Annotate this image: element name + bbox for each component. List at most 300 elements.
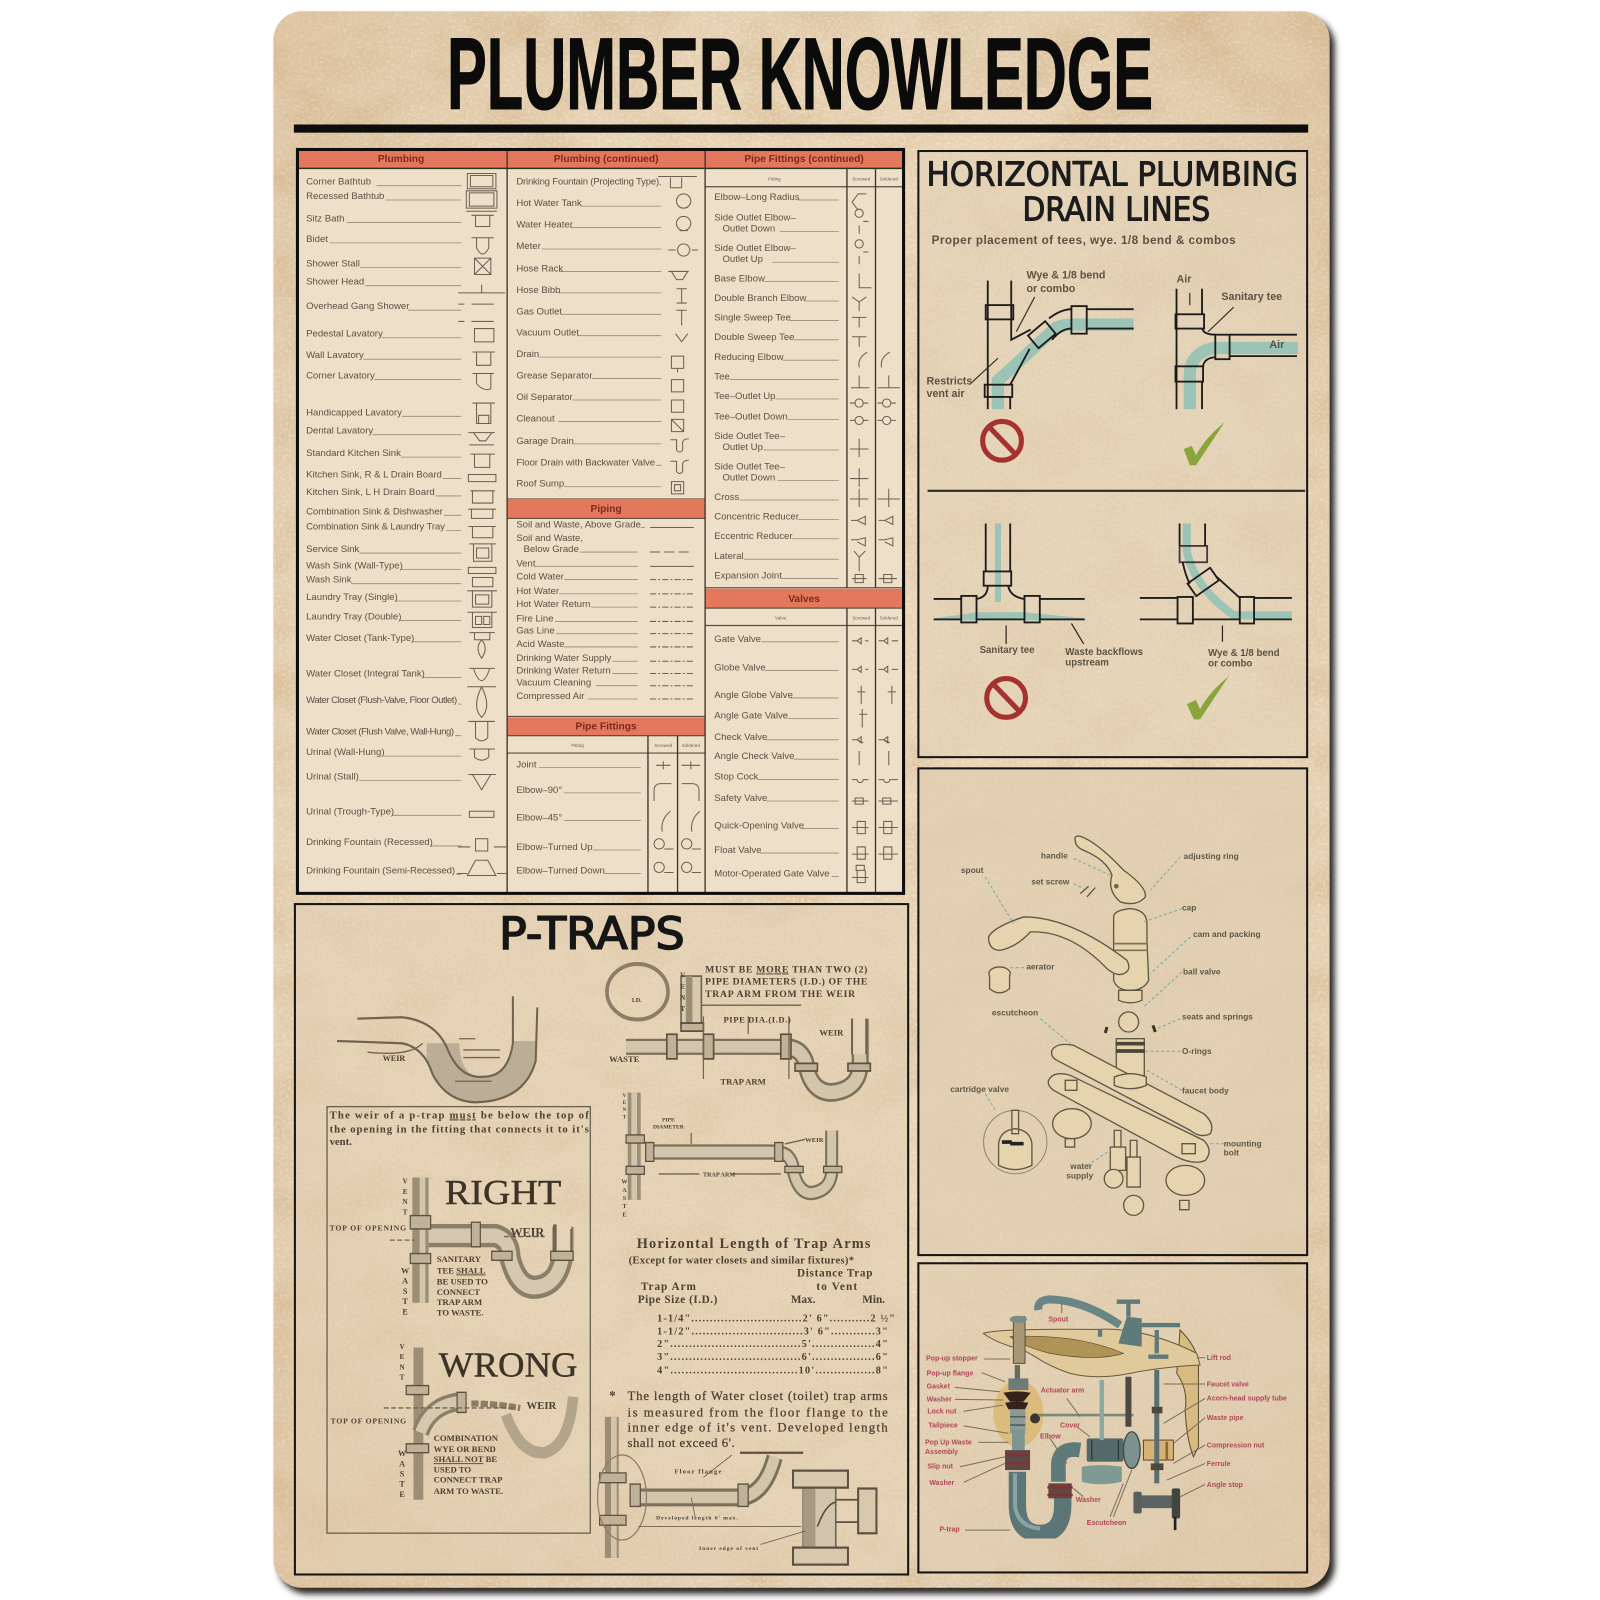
column 1 plumbing fixtures list: Water Closet (Tank-Type)	[306, 633, 414, 644]
column 1 plumbing fixtures list: Urinal (Trough-Type)	[306, 806, 394, 817]
column 1 plumbing fixtures list: Sitz Bath	[306, 213, 344, 224]
sink drawing with labels: Faucet valve	[1207, 1381, 1249, 1388]
column 1 plumbing fixtures list: Pedestal Lavatory	[306, 329, 383, 340]
faucet drawing with labels: adjusting ring	[1184, 851, 1239, 861]
p-trap diagram labels: WEIR	[819, 1028, 844, 1038]
diagram: wrong sanitary tee on horizontal	[934, 523, 1143, 668]
vertical vent and waste letters: N	[399, 1363, 405, 1371]
table: horizontal length of trap arms: 1-1/4"..............................2' 6"...........2 ½"	[657, 1313, 895, 1324]
trap arm diameter rule text: TRAP ARM FROM THE WEIR	[705, 989, 856, 1000]
panel: plumbing symbols chart	[297, 149, 904, 893]
panel heading line 2: DRAIN LINES	[1022, 190, 1210, 228]
valves list: Motor-Operated Gate Valve	[714, 869, 830, 880]
valves list: Stop Cock	[714, 772, 759, 783]
weir explanation box: the opening in the fitting that connects it to it's	[330, 1124, 589, 1136]
piping types list: Soil and Waste,	[516, 533, 583, 544]
column 3 pipe fittings continued list: Side Outlet Elbow–	[714, 243, 796, 254]
table: horizontal length of trap arms: 1-1/2"..............................3' 6"............3"	[657, 1327, 888, 1338]
water closet footnote: The length of Water closet (toilet) trap arms	[628, 1389, 888, 1403]
diagram: wrong wye on horizontal-to-vertical: or combo	[1027, 283, 1076, 295]
faucet drawing with labels: mounting	[1224, 1138, 1262, 1148]
icon: check mark	[1187, 677, 1229, 719]
faucet drawing with labels: cartridge valve	[950, 1084, 1009, 1094]
valves list: Check Valve	[714, 732, 767, 743]
piping types list: Drinking Water Supply	[516, 653, 611, 664]
vertical vent and waste letters: W	[401, 1266, 410, 1275]
column 3 pipe fittings continued list: Side Outlet Tee–	[714, 461, 786, 472]
column 3 pipe fittings continued list: Tee–Outlet Down	[714, 411, 788, 422]
table: horizontal length of trap arms	[629, 1236, 895, 1376]
piping types list: Compressed Air	[516, 691, 585, 702]
column 2 plumbing list: Drain	[516, 349, 539, 360]
vertical vent and waste letters: N	[680, 994, 686, 1002]
pipe fittings list: Elbow–45°	[516, 812, 562, 823]
table: horizontal length of trap arms: Max.	[791, 1294, 816, 1306]
right p-trap diagram	[390, 1177, 573, 1303]
sink drawing with labels: Lift rod	[1207, 1355, 1231, 1362]
chart section headers: Valve	[775, 615, 787, 620]
pipe diameter circle	[607, 964, 668, 1019]
faucet drawing with labels: O-rings	[1182, 1046, 1212, 1056]
plate background	[273, 11, 1335, 1594]
vertical vent and waste letters: W	[621, 1180, 628, 1186]
column 2 plumbing list	[516, 177, 661, 490]
faucet drawing with labels: ball valve	[1183, 967, 1221, 977]
piping types list	[516, 520, 694, 702]
sink drawing with labels: Ferrule	[1207, 1461, 1231, 1468]
vertical vent and waste letters: T	[400, 1374, 405, 1382]
piping types list: Cold Water	[516, 572, 565, 583]
column 3 pipe fittings continued list: Side Outlet Elbow–	[714, 212, 796, 223]
pipe fittings list: Joint	[516, 759, 537, 770]
column 3 pipe fittings continued list: Single Sweep Tee	[714, 312, 791, 323]
diagram: correct sanitary tee: Air	[1269, 339, 1284, 351]
column 1 plumbing fixtures list: Drinking Fountain (Semi-Recessed)	[306, 865, 455, 876]
sink drawing with labels: Spout	[1048, 1316, 1069, 1323]
sink drawing with labels: Escutcheon	[1087, 1520, 1126, 1527]
piping types list: Vacuum Cleaning	[516, 678, 591, 689]
column 3 pipe fittings continued list: Elbow–Long Radius	[714, 192, 800, 203]
water closet footnote: shall not exceed 6'.	[628, 1436, 735, 1450]
water closet footnote: inner edge of it's vent. Developed length	[628, 1421, 888, 1435]
sink drawing with labels: Tailpiece	[928, 1422, 958, 1429]
column 2 plumbing list: Grease Separator	[516, 371, 593, 382]
sink drawing with labels: Waste pipe	[1207, 1415, 1244, 1422]
p-trap diagram labels: BE USED TO	[437, 1277, 488, 1287]
diagram: wrong wye on horizontal-to-vertical: Restricts	[927, 376, 972, 388]
p-trap diagram labels: CONNECT TRAP	[434, 1475, 503, 1485]
panel subheading: Proper placement of tees, wye. 1/8 bend & combos	[932, 234, 1236, 247]
column 1 fixture symbols	[457, 173, 507, 876]
valves list: Angle Gate Valve	[714, 710, 788, 721]
table: horizontal length of trap arms: Distance Trap	[797, 1268, 872, 1280]
p-trap diagram labels: TO WASTE.	[437, 1307, 484, 1317]
p-trap diagram labels: Developed length 6' max.	[656, 1515, 738, 1521]
p-trap diagram labels: I.D.	[632, 998, 642, 1004]
sink drawing with labels: Pop Up Waste	[925, 1440, 972, 1447]
pipe drawings	[337, 964, 876, 1565]
panel: faucet exploded view	[918, 768, 1307, 1255]
column 3 pipe fittings continued list: Side Outlet Tee–	[714, 431, 786, 442]
p-trap diagram labels: COMBINATION	[434, 1433, 499, 1443]
piping types list: Hot Water Return	[516, 599, 590, 610]
sink drawing with labels: Cover	[1060, 1422, 1080, 1429]
p-trap diagram labels: Inner edge of vent	[699, 1546, 758, 1552]
column 1 plumbing fixtures list: Laundry Tray (Single)	[306, 592, 398, 603]
vertical vent and waste letters: T	[623, 1114, 627, 1120]
vertical vent and waste letters: A	[399, 1459, 405, 1468]
pipe fittings list	[516, 759, 701, 876]
column 1 plumbing fixtures list: Dental Lavatory	[306, 426, 373, 437]
valves list: Globe Valve	[714, 662, 766, 673]
vertical vent and waste letters: V	[680, 972, 686, 980]
column 2 plumbing list: Hose Rack	[516, 263, 563, 274]
p-trap diagram labels: TRAP ARM	[437, 1297, 482, 1307]
column 3 pipe fittings continued list: Outlet Down	[722, 224, 775, 235]
sink drawing with labels: Angle stop	[1207, 1482, 1243, 1489]
diagram: wrong sanitary tee on horizontal: upstream	[1065, 657, 1109, 668]
p-trap diagram labels: ARM TO WASTE.	[434, 1486, 503, 1496]
column 1 plumbing fixtures list: Combination Sink & Laundry Tray	[306, 522, 445, 533]
column 1 plumbing fixtures list: Drinking Fountain (Recessed)	[306, 837, 433, 848]
faucet drawing with labels: seats and springs	[1182, 1012, 1253, 1022]
column 2 plumbing list: Floor Drain with Backwater Valve	[516, 457, 655, 468]
column 2 plumbing list: Vacuum Outlet	[516, 328, 579, 339]
pipe fittings list: Elbow–Turned Down	[516, 865, 605, 876]
column 2 plumbing list: Meter	[516, 241, 542, 252]
vertical vent and waste letters: S	[403, 1287, 408, 1296]
large p-trap with weir	[337, 996, 537, 1102]
sink drawing with labels: Washer	[1076, 1497, 1101, 1504]
column 1 plumbing fixtures list: Shower Stall	[306, 258, 360, 269]
vertical vent and waste letters: T	[399, 1480, 405, 1489]
column 1 plumbing fixtures list: Corner Lavatory	[306, 371, 375, 382]
chart section headers: Fitting	[571, 743, 584, 748]
p-trap diagram labels: PIPE DIA.(I.D.)	[723, 1014, 791, 1024]
p-trap diagram labels: TRAP ARM	[703, 1173, 735, 1179]
table: horizontal length of trap arms: Pipe Size (I.D.)	[638, 1294, 718, 1306]
sink drawing with labels: Washer	[927, 1397, 952, 1404]
weir explanation box	[327, 1107, 590, 1533]
column 3 pipe fittings continued list: Tee–Outlet Up	[714, 391, 776, 402]
p-trap diagram labels: TOP OF OPENING	[331, 1416, 406, 1425]
panel heading: P-TRAPS	[499, 907, 685, 960]
water closet footnote: *	[609, 1388, 616, 1403]
icon: check mark	[1184, 422, 1224, 465]
column 1 plumbing fixtures list: Urinal (Stall)	[306, 772, 359, 783]
vertical vent and waste letters: N	[403, 1198, 409, 1206]
piping types list: Drinking Water Return	[516, 665, 611, 676]
vertical vent and waste letters: T	[680, 1005, 685, 1013]
chart section headers: Screwed	[654, 743, 673, 748]
valves list	[714, 634, 839, 880]
p-trap diagram labels: WEIR	[510, 1226, 544, 1240]
chart section headers: Soldered	[880, 177, 898, 182]
p-trap diagram labels: SHALL NOT BE	[434, 1454, 497, 1464]
faucet drawing with labels: bolt	[1224, 1148, 1239, 1158]
column 3 pipe fittings continued list: Eccentric Reducer	[714, 531, 793, 542]
valves list: Safety Valve	[714, 793, 767, 804]
column 3 pipe fittings continued list: Lateral	[714, 551, 744, 562]
chart column headers: Plumbing (continued)	[554, 154, 658, 165]
faucet drawing with labels: set screw	[1031, 877, 1070, 887]
vertical vent and waste letters: W	[398, 1449, 407, 1458]
valves list: Quick-Opening Valve	[714, 821, 804, 832]
pipe fittings list: Elbow–Turned Up	[516, 842, 593, 853]
chart column headers: Pipe Fittings (continued)	[744, 154, 864, 165]
piping types list: Hot Water	[516, 586, 560, 597]
vertical vent and waste letters: E	[623, 1100, 627, 1106]
vertical vent and waste letters: E	[402, 1307, 408, 1316]
column 3 pipe fittings continued list: Outlet Up	[722, 254, 763, 265]
panel heading: HORIZONTAL PLUMBING	[927, 156, 1298, 194]
column 3 pipe fittings continued list: Outlet Up	[722, 442, 763, 453]
sink drawing with labels: Pop-up stopper	[926, 1356, 978, 1363]
diagram: correct wye on horizontal: or combo	[1208, 658, 1252, 669]
faucet drawing with labels: supply	[1066, 1171, 1093, 1181]
piping types list: Acid Waste	[516, 639, 564, 650]
p-trap diagram labels: USED TO	[434, 1464, 471, 1474]
valves list: Gate Valve	[714, 634, 761, 645]
p-trap diagram labels: WYE OR BEND	[434, 1444, 496, 1454]
vertical vent and waste letters: E	[680, 983, 685, 991]
p-trap diagram labels: TEE SHALL	[437, 1265, 486, 1275]
column 2 plumbing symbols	[658, 177, 698, 494]
column 1 plumbing fixtures list: Laundry Tray (Double)	[306, 611, 401, 622]
diagram: correct sanitary tee	[1176, 274, 1298, 409]
sink drawing with labels: P-trap	[939, 1526, 960, 1533]
p-trap diagram labels	[330, 998, 844, 1552]
column 3 pipe fittings continued list: Cross	[714, 492, 740, 503]
trap arm diagram	[626, 976, 870, 1092]
sink drawing with labels: Washer	[929, 1480, 955, 1487]
column 1 plumbing fixtures list: Bidet	[306, 234, 328, 245]
column 2 plumbing list: Garage Drain	[516, 436, 574, 447]
p-trap diagram labels: SANITARY	[437, 1254, 482, 1264]
piping types list: Fire Line	[516, 613, 554, 624]
WRONG label: WRONG	[439, 1346, 578, 1385]
sink drawing with labels: Pop-up flange	[927, 1371, 973, 1378]
sink drawing with labels: Assembly	[925, 1449, 958, 1456]
faucet drawing with labels: cap	[1182, 903, 1196, 913]
trap arm diameter rule text: PIPE DIAMETERS (I.D.) OF THE	[705, 977, 867, 988]
diagram: correct wye on horizontal: Wye & 1/8 bend	[1208, 648, 1280, 659]
vertical vent and waste letters: S	[400, 1470, 405, 1479]
pipe fittings list: Elbow–90°	[516, 785, 562, 796]
valves list: Angle Check Valve	[714, 751, 795, 762]
chart section headers: Piping	[591, 504, 622, 515]
faucet drawing with labels: faucet body	[1182, 1086, 1229, 1096]
icon: prohibited	[987, 679, 1026, 717]
faucet drawing with labels	[950, 836, 1262, 1215]
panel: sink plumbing parts	[918, 1263, 1307, 1572]
chart section headers: Soldered	[880, 615, 898, 620]
column 1 plumbing fixtures list: Corner Bathtub	[306, 177, 371, 188]
sink drawing with labels: Gasket	[927, 1383, 951, 1390]
faucet drawing with labels: aerator	[1026, 962, 1055, 972]
diagram: correct wye on horizontal	[1140, 523, 1292, 669]
water closet footnote: is measured from the floor flange to the	[628, 1405, 888, 1419]
faucet drawing with labels: water	[1069, 1161, 1093, 1171]
column 1 plumbing fixtures list: Wash Sink (Wall-Type)	[306, 560, 403, 571]
column 3 pipe fittings continued list: Double Sweep Tee	[714, 332, 795, 343]
column 2 plumbing list: Water Heater	[516, 220, 574, 231]
piping types list: Below Grade	[523, 544, 579, 555]
table: horizontal length of trap arms: (Except for water closets and similar fixtures)*	[629, 1254, 854, 1266]
p-trap diagram labels: Floor flange	[674, 1468, 721, 1475]
vertical vent and waste letters: V	[623, 1093, 627, 1099]
table: horizontal length of trap arms: 2"...................................5'.................4"	[657, 1339, 888, 1350]
column 1 plumbing fixtures list: Handicapped Lavatory	[306, 407, 402, 418]
vertical vent and waste letters: T	[403, 1208, 408, 1216]
title rule	[294, 124, 1308, 133]
faucet drawing with labels: spout	[961, 865, 984, 875]
column 1 plumbing fixtures list: Standard Kitchen Sink	[306, 448, 401, 459]
column 3 pipe fittings continued list: Concentric Reducer	[714, 511, 800, 522]
valves list: Float Valve	[714, 845, 761, 856]
table: horizontal length of trap arms: Min.	[862, 1294, 885, 1306]
vertical vent and waste letters: A	[402, 1277, 408, 1286]
trap arm diameter rule text: MUST BE MORE THAN TWO (2)	[705, 964, 867, 975]
diagram: wrong wye on horizontal-to-vertical: Wye & 1/8 bend	[1027, 270, 1105, 282]
p-trap diagram labels: WEIR	[805, 1137, 824, 1144]
vertical vent and waste letters: N	[623, 1107, 627, 1113]
faucet drawing with labels: cam and packing	[1193, 929, 1261, 939]
vertical vent and waste letters: V	[399, 1343, 405, 1351]
column 1 plumbing fixtures list: Kitchen Sink, R & L Drain Board	[306, 470, 442, 481]
p-trap diagram labels: DIAMETER	[653, 1125, 685, 1131]
sink drawing with labels	[925, 1299, 1287, 1533]
chart section headers: Screwed	[852, 615, 871, 620]
column 3 pipe fittings continued list	[714, 192, 839, 582]
column 1 plumbing fixtures list: Wash Sink	[306, 575, 352, 586]
column 3 pipe fittings continued list: Outlet Down	[722, 473, 775, 484]
sink drawing with labels: Slip nut	[927, 1463, 954, 1470]
floor flange and vent diagram	[598, 1417, 876, 1565]
second trap arm diagram	[626, 1092, 842, 1200]
p-trap diagram labels: WEIR	[383, 1054, 405, 1063]
p-trap diagram labels: CONNECT	[437, 1287, 480, 1297]
chart column headers	[298, 151, 903, 168]
column 1 plumbing fixtures list: Service Sink	[306, 544, 360, 555]
sink drawing with labels: Compression nut	[1207, 1442, 1265, 1449]
column 2 plumbing list: Hot Water Tank	[516, 198, 582, 209]
vertical vent and waste letters: E	[399, 1490, 405, 1499]
diagram: correct sanitary tee: Air	[1177, 274, 1191, 286]
chart outer frame	[297, 149, 904, 893]
p-trap diagram labels: PIPE	[662, 1117, 675, 1123]
column 1 plumbing fixtures list: Overhead Gang Shower	[306, 301, 410, 312]
vertical vent and waste letters: E	[403, 1188, 408, 1196]
chart section headers: Valves	[788, 594, 820, 605]
p-trap diagram labels: TRAP ARM	[720, 1077, 766, 1087]
vertical vent and waste letters: S	[623, 1196, 627, 1202]
chart section headers: Screwed	[852, 177, 871, 182]
column 3 pipe fittings continued list: Base Elbow	[714, 274, 765, 285]
vertical vent and waste letters	[398, 972, 686, 1499]
table: horizontal length of trap arms: Trap Arm	[641, 1281, 697, 1293]
piping types list: Soil and Waste, Above Grade	[516, 520, 641, 531]
column 2 plumbing list: Roof Sump	[516, 479, 564, 490]
sink drawing with labels: Elbow	[1040, 1433, 1061, 1440]
vertical vent and waste letters: E	[400, 1353, 405, 1361]
column 2 plumbing list: Gas Outlet	[516, 306, 562, 317]
panel: horizontal plumbing drain lines	[918, 151, 1307, 757]
vertical vent and waste letters: E	[622, 1212, 627, 1218]
column 2 plumbing list: Oil Separator	[516, 392, 574, 403]
column 2 plumbing list: Cleanout	[516, 413, 555, 424]
trap arm diameter rule text	[705, 964, 867, 1000]
column 3 pipe fittings continued list: Reducing Elbow	[714, 352, 784, 363]
weir explanation box: vent.	[330, 1136, 352, 1148]
column 1 plumbing fixtures list: Urinal (Wall-Hung)	[306, 747, 385, 758]
column 1 plumbing fixtures list: Shower Head	[306, 277, 364, 288]
diagram: wrong wye on horizontal-to-vertical: vent air	[927, 388, 965, 400]
column 1 plumbing fixtures list: Water Closet (Flush Valve, Wall-Hung)	[306, 727, 454, 738]
column 1 plumbing fixtures list: Water Closet (Flush-Valve, Floor Outlet)	[306, 695, 457, 706]
faucet drawing with labels: escutcheon	[992, 1008, 1038, 1018]
icon: prohibited	[983, 421, 1021, 460]
vertical vent and waste letters: A	[622, 1188, 627, 1194]
chart section headers: Fitting	[768, 177, 781, 182]
sink drawing with labels: Acorn-head supply tube	[1207, 1396, 1287, 1403]
weir explanation box: The weir of a p-trap must be below the top of	[330, 1109, 589, 1121]
column 2 plumbing list: Hose Bibb	[516, 285, 561, 296]
chart column headers: Plumbing	[378, 154, 424, 165]
column 3 fitting symbols	[850, 194, 900, 583]
column 2 plumbing list: Drinking Fountain (Projecting Type)	[516, 177, 659, 188]
column 1 plumbing fixtures list: Wall Lavatory	[306, 350, 364, 361]
valve symbols	[852, 638, 898, 883]
sink drawing with labels: Actuator arm	[1041, 1387, 1084, 1394]
sink drawing with labels: Lock nut	[927, 1409, 957, 1416]
table: horizontal length of trap arms: Horizontal Length of Trap Arms	[637, 1236, 871, 1252]
column 1 plumbing fixtures list: Kitchen Sink, L H Drain Board	[306, 487, 435, 498]
diagram: wrong sanitary tee on horizontal: Sanitary tee	[980, 645, 1035, 656]
column 1 plumbing fixtures list: Combination Sink & Dishwasher	[306, 506, 444, 517]
diagram: correct sanitary tee: Sanitary tee	[1221, 291, 1282, 303]
column 1 plumbing fixtures list	[306, 177, 461, 876]
table: horizontal length of trap arms: 4"..................................10'................8"	[657, 1365, 888, 1376]
valves list: Angle Globe Valve	[714, 690, 793, 701]
column 3 pipe fittings continued list: Tee	[714, 372, 730, 383]
vertical vent and waste letters: T	[402, 1297, 408, 1306]
piping types list: Vent	[516, 558, 536, 569]
column 1 plumbing fixtures list: Recessed Bathtub	[306, 191, 384, 202]
vertical vent and waste letters: V	[403, 1178, 409, 1186]
faucet drawing with labels: handle	[1041, 851, 1068, 861]
table: horizontal length of trap arms: to Vent	[816, 1281, 857, 1293]
diagram: wrong sanitary tee on horizontal: Waste backflows	[1065, 647, 1143, 658]
chart section headers: Pipe Fittings	[576, 722, 637, 733]
RIGHT label: RIGHT	[445, 1173, 561, 1212]
vertical vent and waste letters: T	[622, 1204, 627, 1210]
diagram: wrong wye on horizontal-to-vertical	[927, 270, 1134, 409]
column 3 pipe fittings continued list: Expansion Joint	[714, 571, 782, 582]
p-trap diagram labels: WASTE	[609, 1054, 640, 1064]
p-trap diagram labels: WEIR	[527, 1400, 557, 1412]
water closet footnote	[609, 1388, 888, 1450]
chart section headers	[507, 151, 903, 893]
piping types list: Gas Line	[516, 626, 555, 637]
column 3 pipe fittings continued list: Double Branch Elbow	[714, 293, 806, 304]
table: horizontal length of trap arms: 3"...................................6'.................6"	[657, 1352, 888, 1363]
wrong p-trap diagram	[384, 1348, 573, 1500]
column 1 plumbing fixtures list: Water Closet (Integral Tank)	[306, 669, 425, 680]
p-trap diagram labels: TOP OF OPENING	[330, 1224, 406, 1233]
panel: p-traps	[295, 904, 908, 1574]
chart section headers: Soldered	[682, 743, 700, 748]
